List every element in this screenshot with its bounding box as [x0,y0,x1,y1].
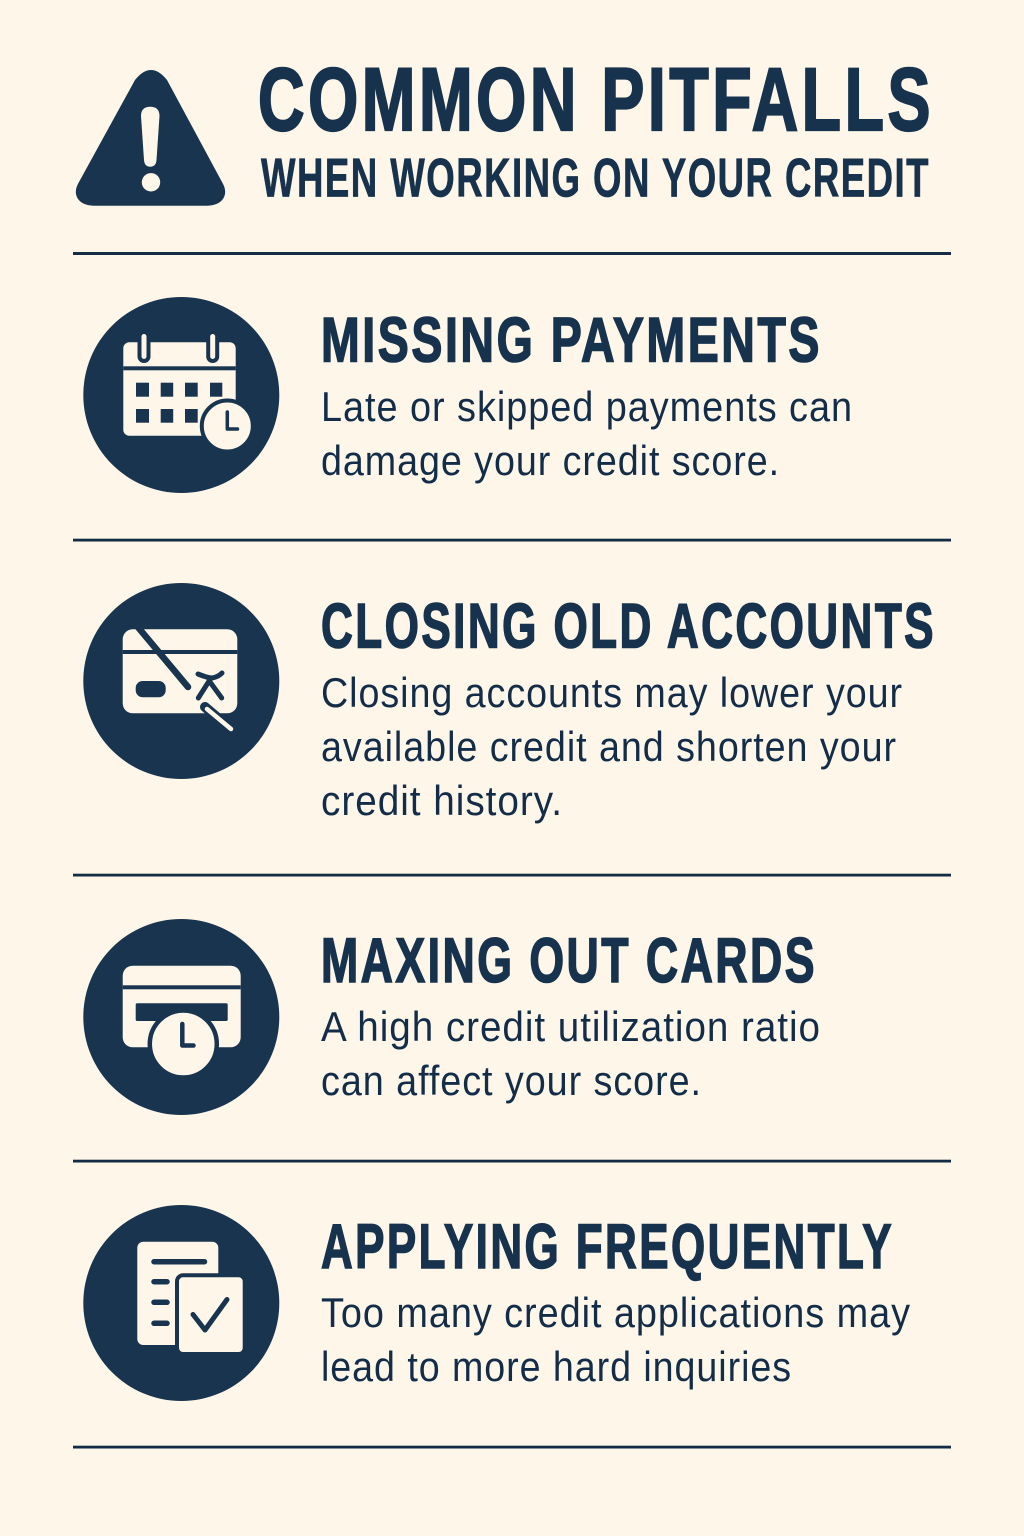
description: credit history. [321,777,563,824]
heading: MISSING PAYMENTS [321,306,822,376]
description [321,669,903,824]
description [321,1003,821,1104]
icon: application documents with check mark [83,1205,279,1401]
icon: calendar with clock [83,297,279,493]
panel: closing old accounts [83,583,936,824]
description: can affect your score. [321,1057,702,1104]
description: lead to more hard inquiries [321,1343,792,1390]
description: A high credit utilization ratio [321,1003,821,1050]
panel: missing payments [83,297,853,493]
panel: applying frequently [83,1205,911,1401]
description [321,383,853,484]
icon: warning triangle [76,70,225,206]
header [76,49,934,208]
icon: credit card with clock [83,919,279,1115]
heading: MAXING OUT CARDS [321,926,817,996]
description: Late or skipped payments can [321,383,853,430]
description [321,1289,911,1390]
icon: crossed-out credit card [83,583,279,779]
description: available credit and shorten your [321,723,897,770]
description: Closing accounts may lower your [321,669,903,716]
description: Too many credit applications may [321,1289,911,1336]
description: damage your credit score. [321,437,780,484]
panel: maxing out cards [83,919,821,1115]
